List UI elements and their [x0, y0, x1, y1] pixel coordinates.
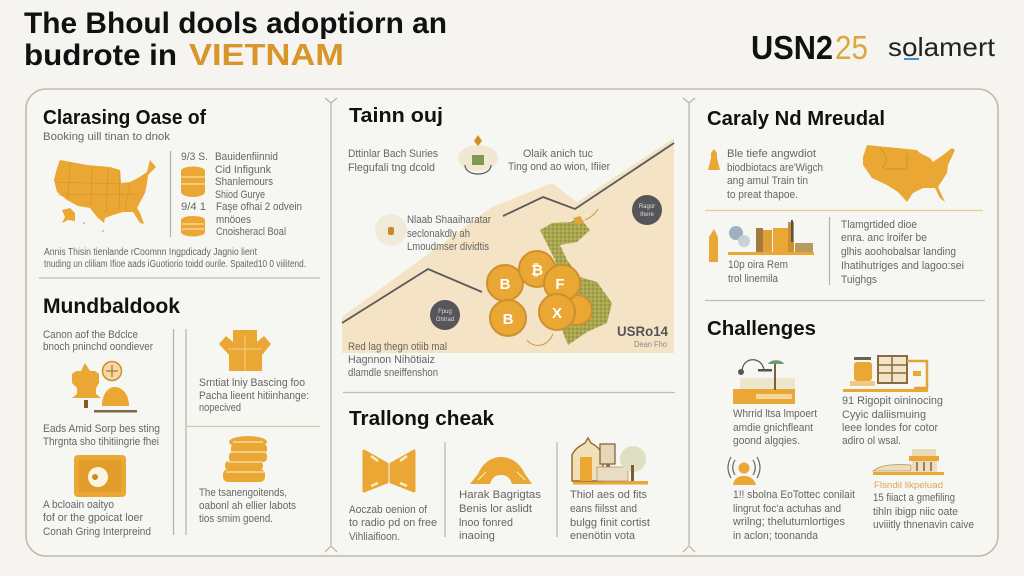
panel: challenges: [707, 318, 974, 542]
paragraph: tnuding un cliliam Ifioe aads iGuotiorio toidd ourile. Spaited10 0 viilitend.: [44, 259, 306, 270]
badge: dark circle bottom: Fpug: [438, 309, 452, 315]
text block: inaoing: [459, 530, 495, 542]
text block: Canon aof the Bdclce: [43, 329, 138, 341]
icon: US map: [54, 160, 156, 232]
text block: to radio pd on free: [349, 517, 437, 529]
stat list: [181, 151, 302, 238]
title: VIETNAM: [189, 37, 344, 72]
text block: Pacha lieent hitiinhange:: [199, 390, 309, 402]
text block: uviiitly thnenavin caive: [873, 519, 974, 531]
trend line: [342, 143, 674, 323]
icon: signal person: [728, 457, 760, 485]
icon: flower marker: [375, 214, 407, 246]
icon: US map small: [863, 145, 955, 202]
title: [24, 7, 447, 72]
stat list: Shanlemours: [215, 176, 273, 188]
icon: office: [843, 356, 928, 392]
heading: Mundbaldook: Mundbaldook: [43, 295, 180, 318]
icon: bell and scale: [72, 362, 137, 412]
heading: Caraly Nd Mreudal: Caraly Nd Mreudal: [707, 108, 885, 130]
text block: Ble tiefe angwdiot: [727, 148, 816, 160]
icon: arch: [470, 457, 532, 484]
text block: [349, 504, 437, 543]
bitcoin coins: F: [555, 276, 565, 293]
text block: [348, 341, 447, 379]
heading: Challenges: Challenges: [707, 318, 816, 340]
panel: left top: [43, 107, 306, 270]
bitcoin coins: [487, 251, 592, 336]
text block: Aoczab oenion of: [349, 504, 428, 516]
text block: [728, 259, 788, 285]
text block: to preat thapoe.: [727, 189, 798, 201]
stat list: mnöoes: [216, 214, 251, 226]
text block: lingrut foc'a actuhas and: [733, 503, 841, 515]
text block: [348, 148, 438, 174]
logo: USN2 25: USN2: [751, 29, 833, 66]
text block: Srntiat lniy Bascing foo: [199, 377, 305, 389]
text block: Lmoudmser dividtis: [407, 241, 489, 253]
text block: Cyyic daliismuing: [842, 409, 926, 421]
panel: centre bottom: [349, 408, 650, 543]
bitcoin coins: B: [500, 276, 511, 293]
badge: dark circle bottom: Ghtrad: [436, 317, 454, 323]
heading: Tainn ouj: Tainn ouj: [349, 105, 443, 127]
logo: USN2 25: 25: [835, 29, 868, 66]
text block: tios smim goend.: [199, 513, 273, 525]
text block: lnoo fonred: [459, 517, 513, 529]
text block: Thiol aes od fits: [570, 489, 647, 501]
subheading: Booking uill tinan to dnok: [43, 131, 171, 143]
text block: [459, 489, 542, 542]
value label: [617, 323, 668, 349]
text block: eans fiilsst and: [570, 503, 637, 515]
icon: shrine: [458, 135, 498, 174]
icon: plate: [74, 455, 126, 497]
text block: [727, 148, 823, 201]
text block: enra. anc lroifer be: [841, 232, 927, 244]
paragraph: [44, 247, 306, 270]
text block: [508, 148, 610, 173]
stat list: Cnoisheracl Boal: [216, 226, 286, 238]
logo: solamert: solamert: [888, 32, 996, 62]
text block: A bcloain oaityo: [43, 499, 114, 511]
stat list: Bauidenfiinnid: [215, 151, 278, 163]
title: budrote in: [24, 39, 177, 72]
area chart: [342, 138, 674, 353]
text block: enenötin vota: [570, 530, 636, 542]
icon: coin stack 2: [181, 216, 205, 236]
text block: bnoch pninchd oondiever: [43, 341, 153, 353]
stat list: Cid Infigunk: [215, 164, 271, 176]
text block: oabonl ah ellier labots: [199, 500, 296, 512]
text block: trol linemila: [728, 273, 779, 285]
text block: biodbiotacs are'Wigch: [727, 162, 823, 174]
value label: Dean Fho: [634, 340, 668, 349]
text block: Tlamgrtided dioe: [841, 219, 917, 231]
panel: left bottom: [43, 295, 320, 538]
text block: Tuighgs: [841, 274, 877, 286]
text block: wrilng; thelutumlortiges: [732, 516, 845, 528]
icon: cityscape: [728, 220, 814, 255]
value label: USRo14: [617, 323, 668, 339]
text block: leee londes for cotor: [842, 422, 938, 434]
text block: fof or the gpoicat loer: [43, 512, 143, 524]
text block: Whrrid ltsa lmpoert: [733, 408, 817, 420]
heading: Trallong cheak: Trallong cheak: [349, 408, 495, 430]
text block: [841, 219, 964, 286]
text block: Eads Amid Sorp bes sting: [43, 423, 160, 435]
text block: seclonakdly ah: [407, 228, 470, 240]
text block: Flsndil likpeluad: [874, 480, 943, 490]
paragraph: Annis Thisin tienlande rCoomnn Ingpdicady Jagnio lient: [44, 247, 257, 258]
text block: The tsanengoitends,: [199, 487, 287, 499]
text block: [842, 395, 943, 447]
badge: dark circle bottom: [430, 300, 460, 330]
icon: coin stack 1: [181, 166, 205, 197]
text block: 1!! sbolna EoTottec conilait: [733, 489, 855, 501]
stat list: 9/3 S.: [181, 151, 208, 163]
text block: [199, 487, 296, 525]
text block: 91 Rigopit oininocing: [842, 395, 943, 407]
icon: temple and tree: [572, 438, 648, 484]
icon: bow: [364, 451, 414, 491]
bitcoin coins: X: [552, 305, 562, 322]
bitcoin coins: ₿: [531, 262, 543, 279]
text block: tihln ibigp niic oate: [873, 506, 958, 518]
icon: building and road: [873, 449, 944, 475]
title: The Bhoul dools adoptiorn an: [24, 7, 447, 40]
text block: adiro ol wsal.: [842, 435, 901, 447]
stat list: 9/4 1: [181, 201, 206, 213]
panel: right top: [705, 108, 983, 286]
text block: Harak Bagrigtas: [459, 489, 542, 501]
text block: Benis lor aslidt: [459, 503, 532, 515]
icon: box: [219, 330, 271, 371]
text block: [407, 214, 491, 253]
text block: [43, 499, 151, 538]
badge: dark circle top: Ragor: [639, 204, 655, 210]
text block: Olaik anich tuc: [523, 148, 593, 160]
text block: [570, 489, 650, 542]
text block: 15 fiiact a gmefiling: [873, 492, 955, 504]
text block: Flegufali tng dcold: [348, 162, 435, 174]
text block: [733, 408, 817, 447]
text block: Nlaab Shaaiharatar: [407, 214, 491, 226]
heading: Clarasing Oase of: Clarasing Oase of: [43, 107, 206, 129]
main frame: [26, 89, 998, 556]
text block: 10p oira Rem: [728, 259, 788, 271]
text block: Hagnnon Nihötiaiz: [348, 354, 435, 366]
text block: Ting ond ao wion, Ifiier: [508, 161, 610, 173]
text block: ang amul Train tin: [727, 175, 808, 187]
text block: [43, 423, 160, 448]
text block: bulgg finit cortist: [570, 517, 650, 529]
text block: Ihatihutriges and lagoo:sei: [841, 260, 964, 272]
text block: Red lag thegn otiib mal: [348, 341, 447, 353]
text block: [873, 480, 974, 531]
badge: dark circle top: Ihere: [640, 212, 654, 218]
text block: nopecived: [199, 402, 241, 414]
text block: dlamdle sneiffenshon: [348, 367, 438, 379]
text block: [43, 329, 153, 353]
text block: goond algqies.: [733, 435, 800, 447]
icon: desk and palm: [733, 360, 795, 404]
text block: [732, 489, 855, 542]
icon: coin pile: [223, 436, 267, 482]
text block: in aclon; toonanda: [733, 530, 819, 542]
text block: Dttinlar Bach Suries: [348, 148, 438, 160]
stat list: Shiod Gurye: [215, 189, 265, 201]
text block: Conah Gring Interpreind: [43, 526, 151, 538]
panel: centre chart: [342, 105, 674, 379]
bitcoin coins: B: [503, 311, 514, 328]
map: Vietnam: [527, 209, 612, 345]
text block: Thrgnta sho tihitiingrie fhei: [43, 436, 159, 448]
icon: cone: [708, 149, 720, 170]
badge: dark circle top: [632, 195, 662, 225]
text block: [199, 377, 309, 414]
stat list: Faşe ofhai 2 odvein: [216, 201, 302, 213]
text block: amdie gnichfleant: [733, 422, 813, 434]
text block: glhis aoohobalsar landing: [841, 246, 956, 258]
text block: Vihliaifioon.: [349, 531, 400, 543]
icon: tower: [709, 229, 718, 262]
